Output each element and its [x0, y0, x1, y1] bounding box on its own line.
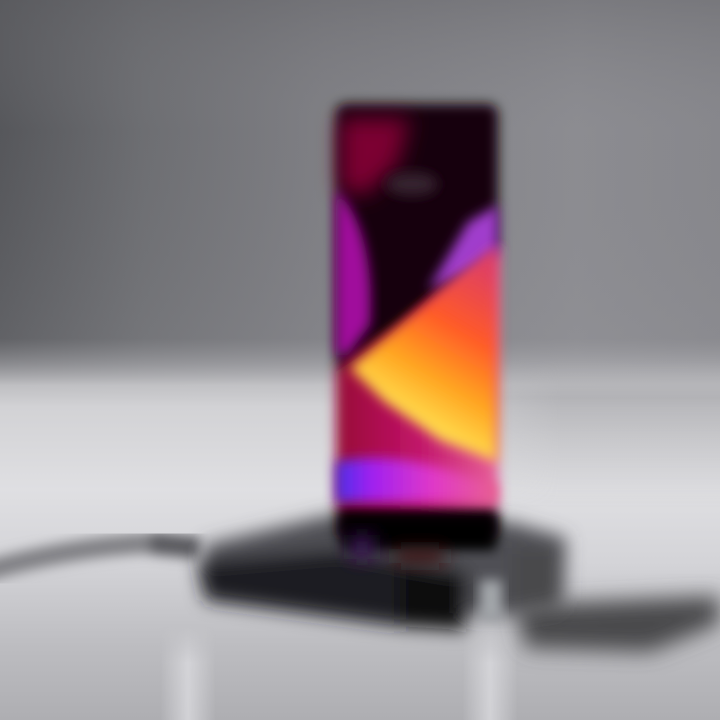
magenta band at bottom of screen [336, 458, 497, 502]
status smudge on screen [386, 172, 438, 196]
dock highlight [480, 580, 502, 620]
charging dock [197, 515, 566, 630]
charging cable [0, 543, 200, 574]
dock shadow on floor [515, 596, 720, 652]
violet wedge on right of screen [428, 205, 498, 290]
black lower bezel [342, 516, 496, 550]
magenta wave on left of screen [336, 190, 371, 355]
orange and yellow wedge [350, 245, 497, 462]
floor reflections below dock [166, 640, 512, 720]
phone [336, 104, 498, 540]
crimson glow at top of screen [340, 118, 410, 195]
phone base connector [350, 535, 445, 564]
phone screen wallpaper [336, 250, 498, 505]
